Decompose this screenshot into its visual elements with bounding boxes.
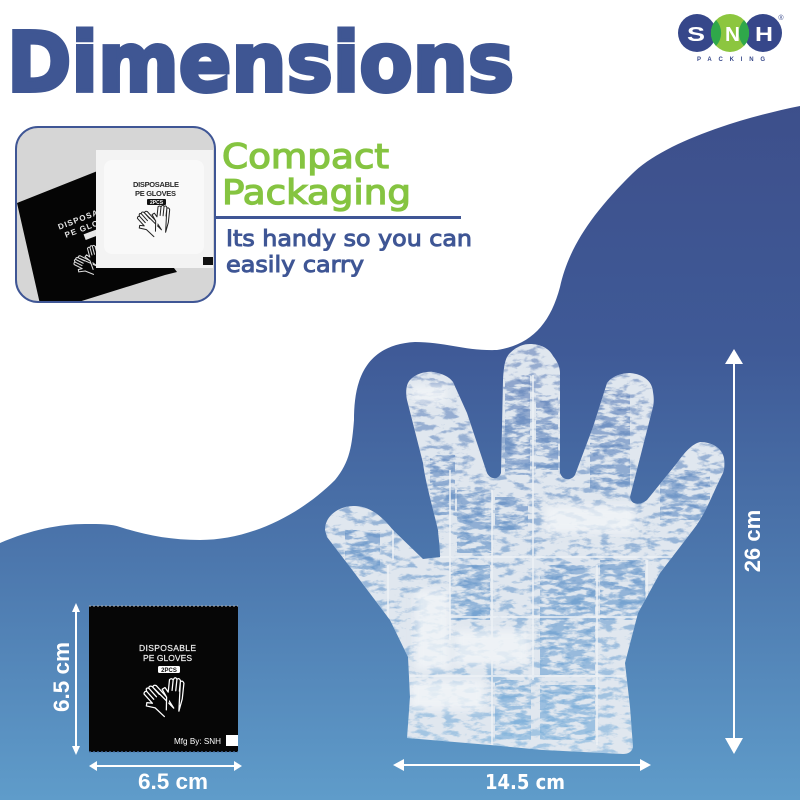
black sachet [89,606,238,752]
text: description: Its handy so you can [226,226,472,252]
divider line [216,216,461,219]
white glove sachet: PE GLOVES [135,189,176,198]
black sachet: 2PCS [161,668,177,674]
text: description [226,226,472,278]
glove [320,340,730,760]
white glove sachet: 2PCS [150,200,164,206]
heading: Compact Packaging [222,137,411,213]
logo: SNH Packing: N [725,24,740,46]
label: sachet width: 6.5 cm [138,769,208,794]
logo: SNH Packing: S [687,24,705,46]
arrow: width [393,759,651,771]
black glove sachet, tilted: DISPOSABLE [57,201,118,232]
arrow: sachet width [89,761,242,771]
black sachet: PE GLOVES [143,653,192,663]
logo: SNH Packing: ® [778,14,784,22]
panel: packaging photo [16,127,215,304]
title: Dimensions [7,16,514,111]
black glove sachet, tilted: PE GLOVES [64,212,118,240]
white glove sachet [96,150,213,268]
logo: SNH Packing [678,14,784,63]
heading: Compact Packaging: Compact [222,137,389,177]
logo: SNH Packing: H [755,24,773,46]
label: sachet height: 6.5 cm [49,642,74,712]
black sachet: DISPOSABLE [139,643,196,653]
label: 14.5 cm: 14.5 cm [485,770,565,794]
black sachet with dimensions [49,603,242,794]
black sachet: Mfg By: SNH [174,737,221,746]
arrow: height [725,349,743,754]
logo: SNH Packing: PACKING [697,57,765,63]
label: 26 cm: 26 cm [740,510,765,572]
glove photo with dimensions [320,340,765,794]
black glove sachet, tilted [17,170,177,304]
heading: Compact Packaging: Packaging [222,173,411,213]
arrow: sachet height [72,603,80,755]
white glove sachet: DISPOSABLE [133,180,179,189]
text: description: easily carry [226,252,364,278]
